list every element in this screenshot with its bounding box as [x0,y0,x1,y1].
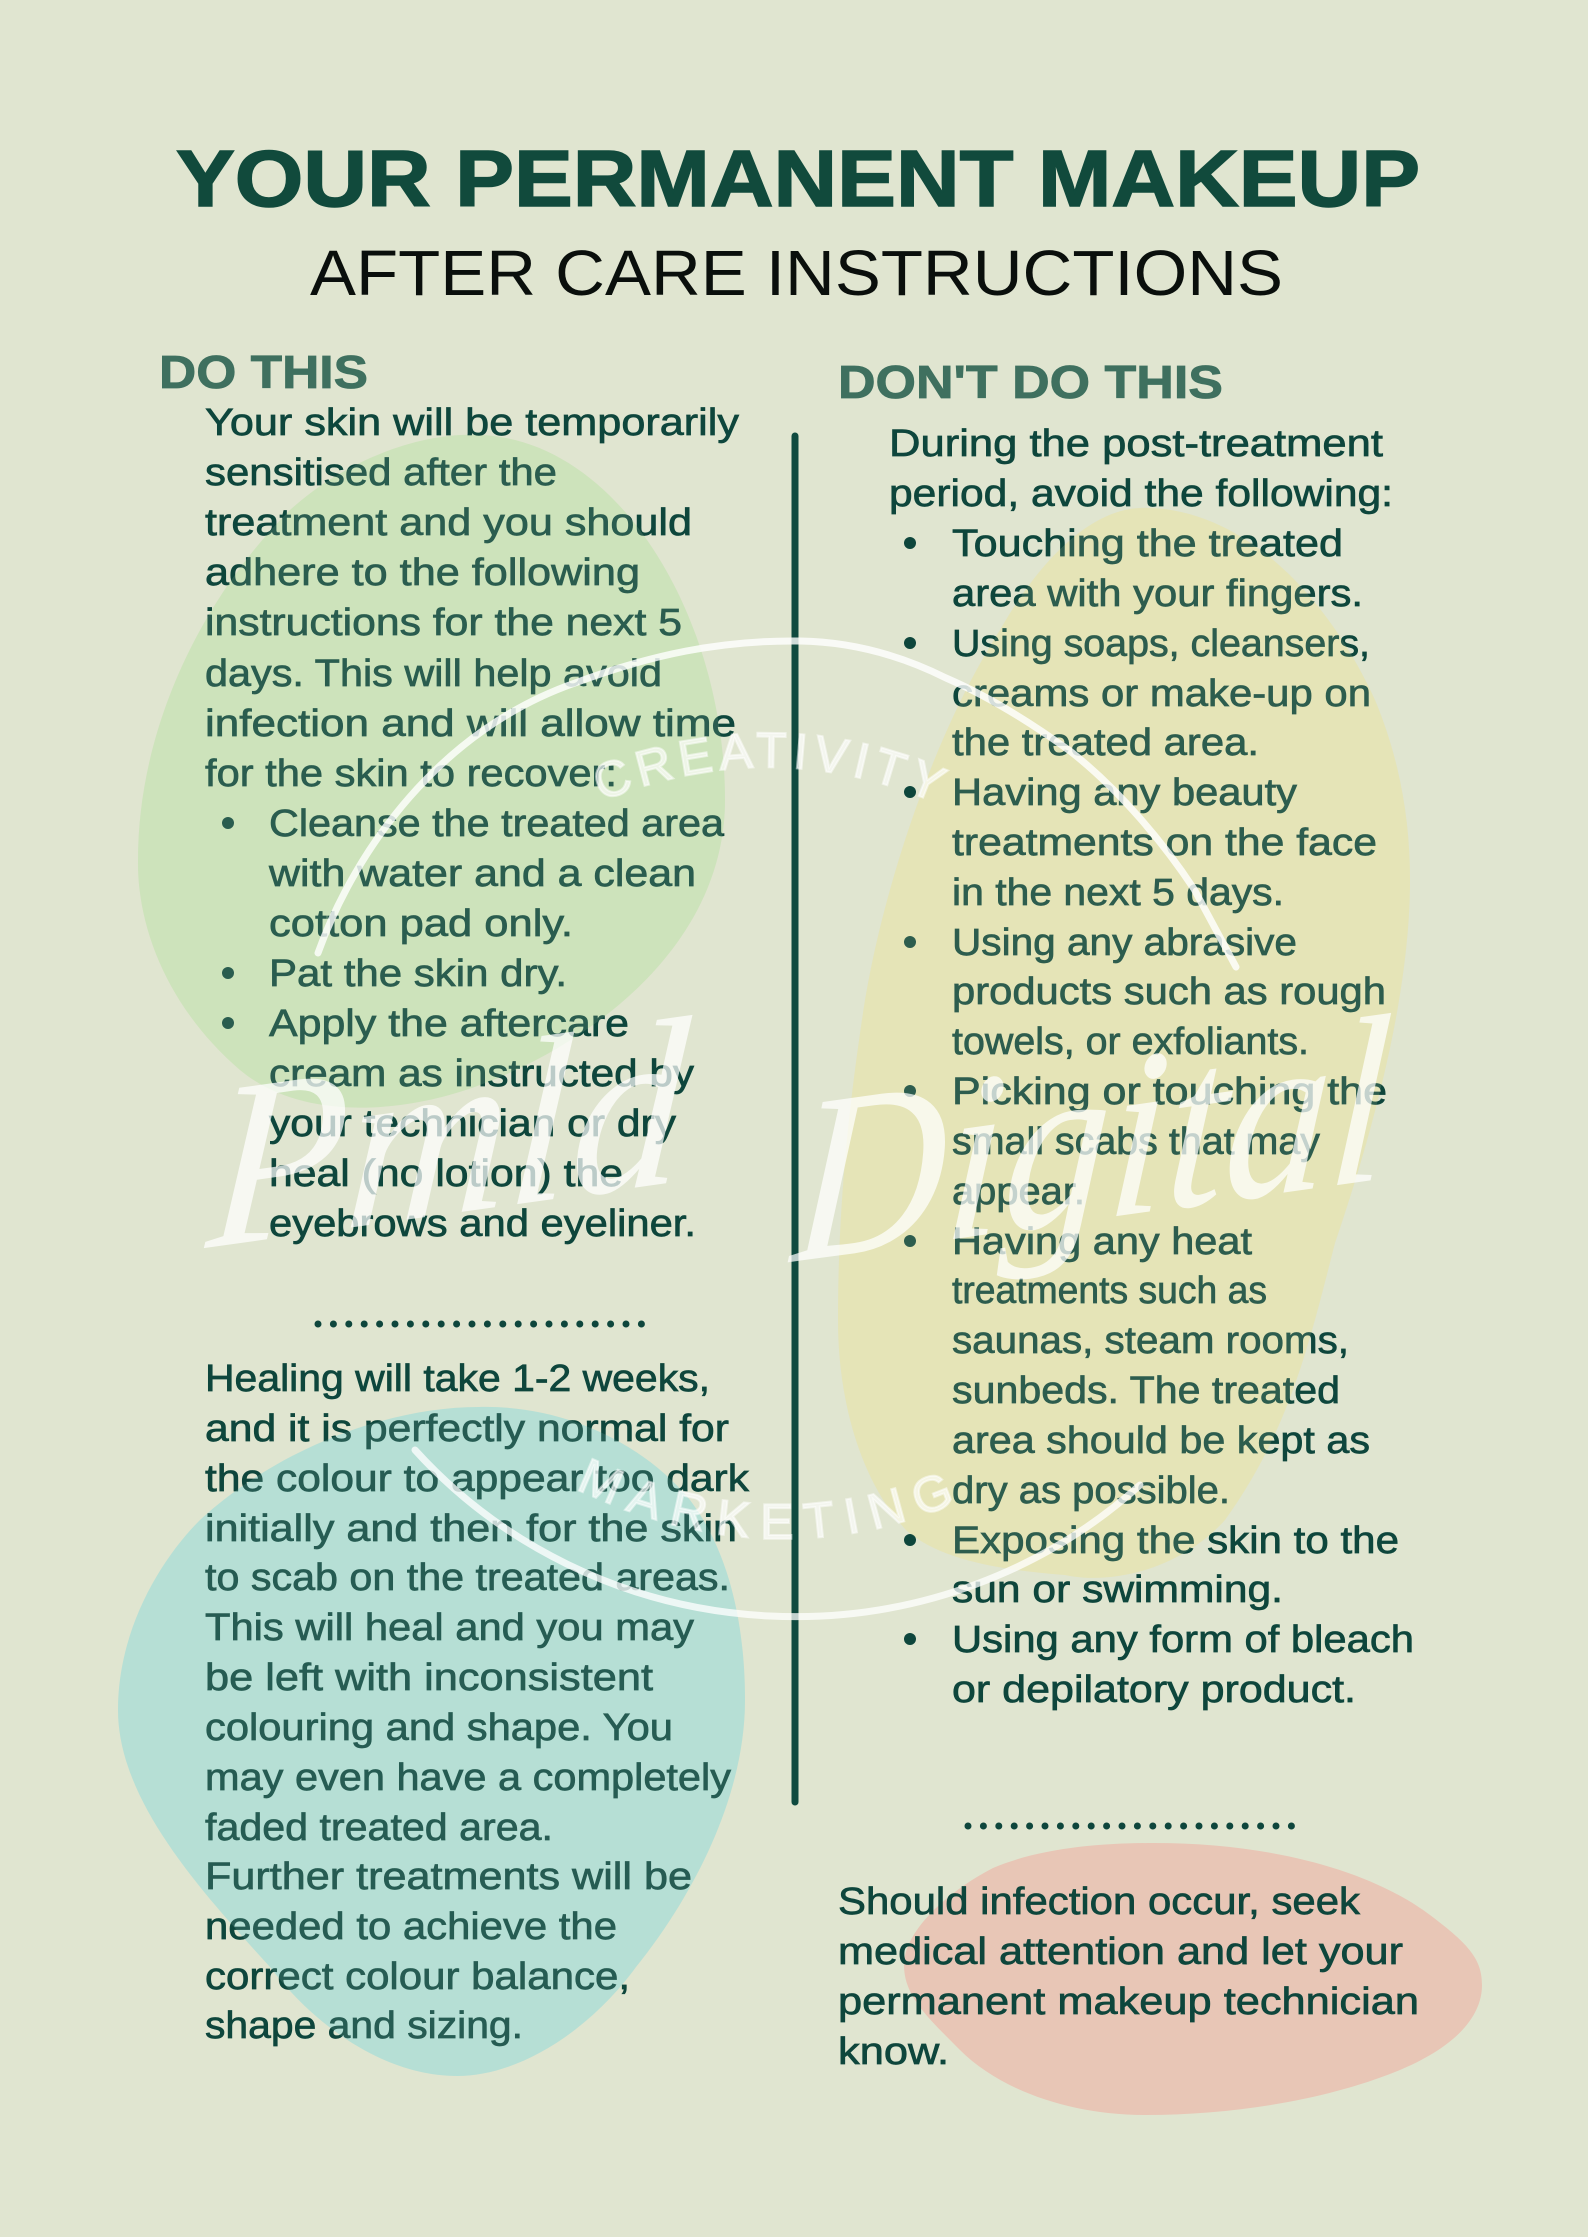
text block: don't do this intro: period, avoid the following: [889,473,1393,515]
bullet list: do this: cream as instructed by [269,1053,694,1095]
bullet list: don't do this: saunas, steam rooms, [952,1320,1349,1362]
watermark: MARKETING [578,1458,952,1540]
bullet list: don't do this: Exposing the skin to the [952,1520,1399,1562]
bullet list: don't do this: small scabs that may [952,1121,1320,1163]
title: YOUR PERMANENT MAKEUP [176,134,1420,223]
text block: healing: Healing will take 1-2 weeks, [205,1358,710,1400]
text block: infection note: medical attention and let your [838,1931,1403,1973]
text block: do this intro: infection and will allow time [205,703,736,745]
text block: healing: initially and then for the skin [205,1508,737,1550]
text block: healing: needed to achieve the [205,1906,617,1948]
blob: teal [118,1407,745,2076]
text block: do this intro [205,402,739,795]
blob: green [138,435,725,1108]
bullet list: do this [222,803,725,1245]
text block: do this intro: for the skin to recover: [205,753,617,795]
subtitle: AFTER CARE INSTRUCTIONS [310,237,1283,309]
text block: healing: and it is perfectly normal for [205,1408,729,1450]
text block: infection note [838,1881,1419,2073]
text block: don't do this intro: During the post-treatment [889,423,1383,465]
bullet list: do this: Pat the skin dry. [269,953,567,995]
text block: infection note: permanent makeup technician [838,1981,1419,2023]
bullet list: don't do this: area with your fingers. [952,573,1363,615]
bullet list: don't do this: or depilatory product. [952,1669,1356,1711]
text block: do this intro: sensitised after the [205,452,557,494]
bullet list: don't do this: in the next 5 days. [952,872,1284,914]
bullet list: do this: your technician or dry [269,1103,676,1145]
text block: healing: faded treated area. [205,1807,553,1849]
bullet list: don't do this: sun or swimming. [952,1569,1283,1611]
bullet list: do this: Apply the aftercare [269,1003,629,1045]
watermark: Digital [784,966,1399,1315]
text block: don't do this intro [889,423,1393,515]
text block: infection note: know. [838,2031,949,2073]
text block: infection note: Should infection occur, seek [838,1881,1361,1923]
bullet list: don't do this: Touching the treated [952,523,1343,565]
heading: do this: DO THIS [159,346,368,398]
text block: healing: This will heal and you may [205,1607,694,1649]
bullet list: do this: eyebrows and eyeliner. [269,1203,696,1245]
blob: pink [904,1843,1482,2115]
bullet list: don't do this: towels, or exfoliants. [952,1021,1309,1063]
bullet list: don't do this: products such as rough [952,971,1386,1013]
bullet list: don't do this [904,523,1414,1711]
text block: do this intro: instructions for the next 5 [205,602,682,644]
heading: don't do this: DON'T DO THIS [838,356,1223,408]
bullet list: do this: with water and a clean [268,853,696,895]
blob: yellow [838,508,1410,1578]
bullet list: don't do this: appear. [952,1171,1085,1213]
bullet list: don't do this: treatments on the face [952,822,1377,864]
vertical divider [792,436,798,1802]
bullet list: don't do this: treatments such as [952,1270,1267,1312]
bullet list: don't do this: Using soaps, cleansers, [952,623,1370,665]
text block: healing: Further treatments will be [205,1856,692,1898]
watermark [199,638,1399,1620]
text block: healing: correct colour balance, [205,1956,630,1998]
watermark: CREATIVITY [595,732,950,799]
text block: do this intro: Your skin will be temporarily [205,402,739,444]
text block: healing [205,1358,750,2047]
bullet list: don't do this: the treated area. [952,722,1259,764]
bullet list: don't do this: Using any form of bleach [952,1619,1414,1661]
text block: healing: be left with inconsistent [205,1657,653,1699]
dotted separator: right [968,1822,1292,1830]
bullet list: don't do this: Having any heat [952,1221,1252,1263]
text block: do this intro: days. This will help avoid [205,653,662,695]
bullet list: don't do this: Picking or touching the [952,1071,1387,1113]
bullet list: don't do this: area should be kept as [952,1420,1370,1462]
text block: do this intro: treatment and you should [205,502,692,544]
text block: healing: colouring and shape. You [205,1707,673,1749]
bullet list: do this: Cleanse the treated area [269,803,725,845]
text block: healing: the colour to appear too dark [205,1458,750,1500]
text block: do this intro: adhere to the following [205,552,640,594]
bullet list: don't do this: Having any beauty [952,772,1297,814]
bullet list: don't do this: Using any abrasive [952,922,1297,964]
bullet list: do this: cotton pad only. [269,903,573,945]
bullet list: don't do this: dry as possible. [952,1470,1230,1512]
bullet list: don't do this: creams or make-up on [952,673,1371,715]
watermark: Pmld [199,968,696,1301]
bullet list: don't do this: sunbeds. The treated [952,1370,1340,1412]
text block: healing: may even have a completely [205,1757,731,1799]
text block: healing: shape and sizing. [205,2005,523,2047]
text block: healing: to scab on the treated areas. [205,1557,730,1599]
bullet list: do this: heal (no lotion) the [269,1153,623,1195]
dotted separator: left [318,1320,642,1328]
